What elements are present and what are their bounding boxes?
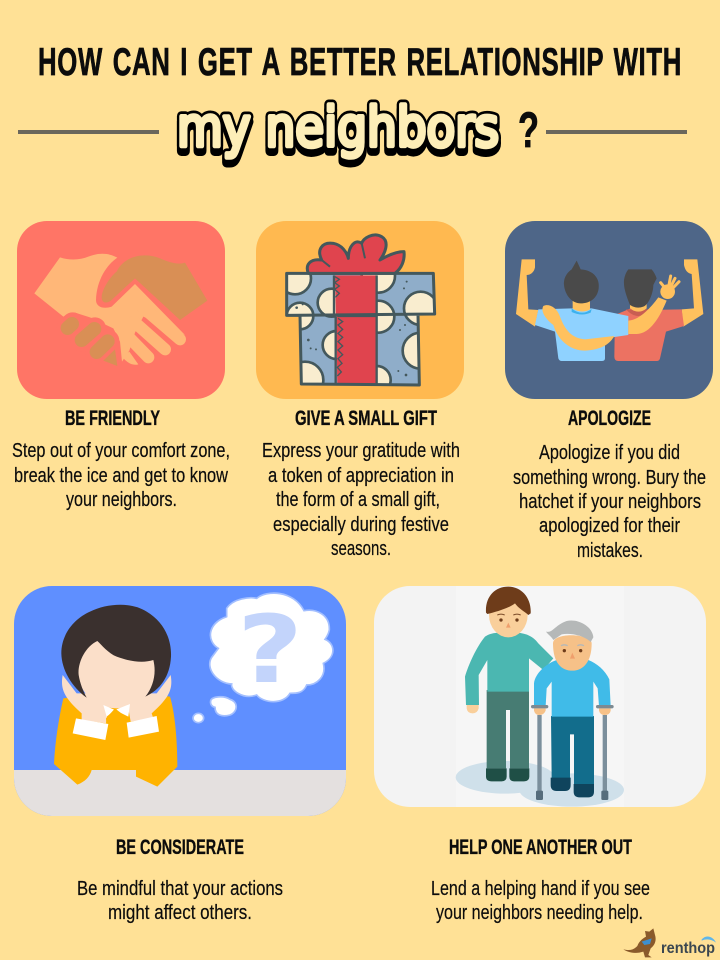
panel: help one another out bbox=[374, 586, 706, 807]
icon: handshake bbox=[34, 254, 207, 366]
subtitle: my neighbors: my neighbors bbox=[177, 96, 499, 159]
icon: two friends bbox=[516, 259, 703, 361]
panel: be considerate bbox=[14, 586, 346, 816]
text: apologize bbox=[513, 407, 706, 562]
text: give a small gift: GIVE A SMALL GIFT bbox=[295, 407, 437, 430]
text: be friendly: BE FRIENDLY bbox=[65, 407, 160, 430]
subtitle: my neighbors: my neighbors bbox=[177, 96, 499, 159]
icon: helper and elderly man bbox=[456, 587, 624, 807]
icon: question mark: ? bbox=[237, 596, 303, 705]
text: be friendly: Step out of your comfort zone, bbox=[12, 439, 230, 462]
text: give a small gift: Express your gratitude with bbox=[262, 439, 460, 462]
text: be friendly: break the ice and get to know bbox=[14, 464, 228, 487]
text: be considerate: BE CONSIDERATE bbox=[116, 836, 244, 859]
text: be considerate bbox=[77, 836, 283, 924]
subtitle: my neighbors: ? bbox=[518, 102, 539, 158]
text: apologize: mistakes. bbox=[577, 539, 643, 562]
text: give a small gift: especially during festive bbox=[273, 513, 449, 536]
text: give a small gift: a token of appreciation in bbox=[268, 464, 454, 487]
panel: apologize bbox=[505, 221, 713, 399]
panel: be friendly bbox=[17, 221, 225, 399]
text: apologize: Apologize if you did bbox=[539, 441, 680, 464]
text: help one another out: your neighbors needing help. bbox=[436, 901, 643, 924]
text: give a small gift bbox=[262, 407, 460, 560]
icon: thinking person bbox=[54, 605, 177, 787]
text: be considerate: Be mindful that your actions bbox=[77, 877, 283, 900]
logo: renthop bbox=[623, 928, 716, 957]
text: give a small gift: seasons. bbox=[331, 537, 391, 560]
text: help one another out: Lend a helping hand if you see bbox=[431, 877, 650, 900]
text: be considerate: might affect others. bbox=[108, 901, 252, 924]
text: help one another out bbox=[431, 836, 650, 924]
subtitle: my neighbors bbox=[18, 96, 687, 164]
text: be friendly: your neighbors. bbox=[66, 488, 177, 511]
text: be friendly bbox=[12, 407, 230, 511]
text: give a small gift: the form of a small gift, bbox=[276, 488, 440, 511]
logo: renthop: renthop bbox=[661, 940, 715, 957]
text: help one another out: HELP ONE ANOTHER OUT bbox=[449, 836, 632, 859]
icon: thought cloud bbox=[193, 593, 333, 723]
text: apologize: APOLOGIZE bbox=[568, 407, 651, 430]
panel: small gift bbox=[256, 221, 464, 399]
text: apologize: apologized for their bbox=[539, 514, 680, 537]
icon: gift box bbox=[285, 233, 436, 386]
subtitle: my neighbors: my neighbors bbox=[177, 101, 499, 164]
